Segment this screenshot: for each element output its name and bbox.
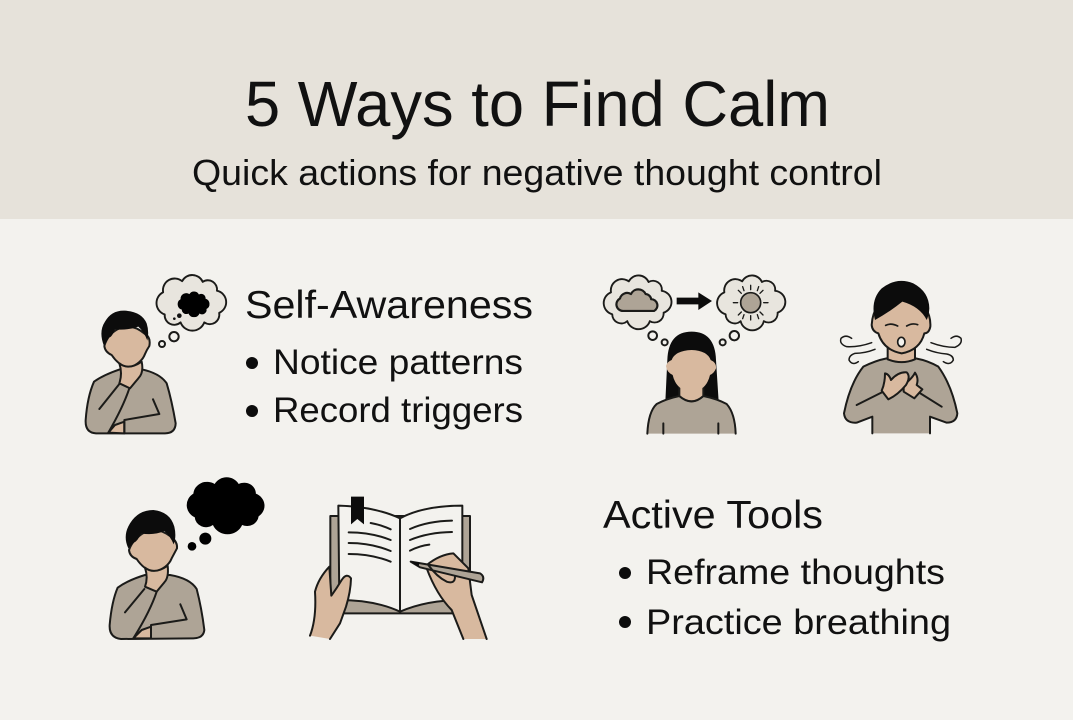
left page text lines	[349, 523, 391, 562]
right arm and hand	[427, 553, 487, 639]
right page	[400, 506, 462, 612]
bullet list: active tools: Reframe thoughts	[646, 553, 945, 592]
subtitle: Quick actions for negative thought control	[192, 152, 882, 193]
icon: woman reframing cloud to sun	[604, 275, 785, 434]
sun thought	[717, 275, 785, 330]
bullet list: self-awareness: Record triggers	[273, 391, 523, 430]
left breath swirls	[841, 336, 875, 363]
sleeve lines	[663, 423, 718, 434]
body	[86, 369, 176, 433]
hair	[126, 510, 175, 548]
thought bubbles	[648, 331, 739, 345]
right hand	[904, 373, 922, 398]
left hand	[882, 372, 909, 399]
face	[872, 298, 930, 353]
bookmark	[351, 497, 364, 524]
face	[666, 350, 716, 393]
body	[844, 358, 957, 433]
arm lines	[99, 384, 159, 433]
left hand	[310, 567, 351, 639]
body	[110, 575, 204, 639]
arm lines	[125, 589, 187, 638]
fingers	[428, 565, 455, 582]
closed eyes	[886, 324, 918, 326]
dark thought cloud	[187, 477, 265, 534]
pen tip	[411, 562, 419, 567]
icon: open journal with writing hands	[310, 497, 487, 639]
hair	[665, 332, 719, 402]
hand on chin	[119, 362, 142, 388]
icon: man with big dark thought	[110, 477, 265, 639]
bullet list: active tools: Practice breathing	[646, 603, 951, 642]
neck	[888, 345, 915, 362]
neck	[679, 385, 703, 401]
right page text lines	[410, 521, 452, 551]
icon: thinking man with dark thought	[86, 275, 226, 433]
dark thought	[178, 291, 210, 317]
right breath swirls	[927, 336, 961, 363]
book cover	[330, 516, 470, 613]
header band	[0, 0, 1073, 219]
heading: Self-Awareness: Self-Awareness	[245, 284, 533, 327]
lower hand	[108, 422, 124, 433]
hand on chin	[145, 566, 168, 592]
thought bubbles	[188, 533, 211, 551]
title: 5 Ways to Find Calm	[245, 68, 830, 140]
thought bubbles	[159, 313, 182, 347]
heading: Active Tools: Active Tools	[603, 494, 823, 537]
left page	[338, 506, 400, 612]
bullet list: active tools	[619, 553, 951, 642]
sun	[733, 285, 768, 320]
shoulders	[647, 396, 736, 434]
thought cloud	[156, 275, 226, 331]
cloud thought	[604, 275, 671, 329]
pen	[411, 562, 483, 582]
bullet list: self-awareness: Notice patterns	[273, 343, 523, 382]
arm lines	[857, 390, 942, 407]
icon: man breathing	[841, 281, 961, 433]
grey cloud	[616, 289, 657, 311]
face	[129, 530, 177, 572]
arrow	[677, 292, 712, 310]
face	[104, 326, 150, 368]
hair	[873, 281, 929, 320]
mouth	[898, 337, 905, 347]
bullet list: self-awareness	[246, 343, 523, 430]
lower hand	[133, 627, 151, 638]
hair	[101, 311, 148, 346]
